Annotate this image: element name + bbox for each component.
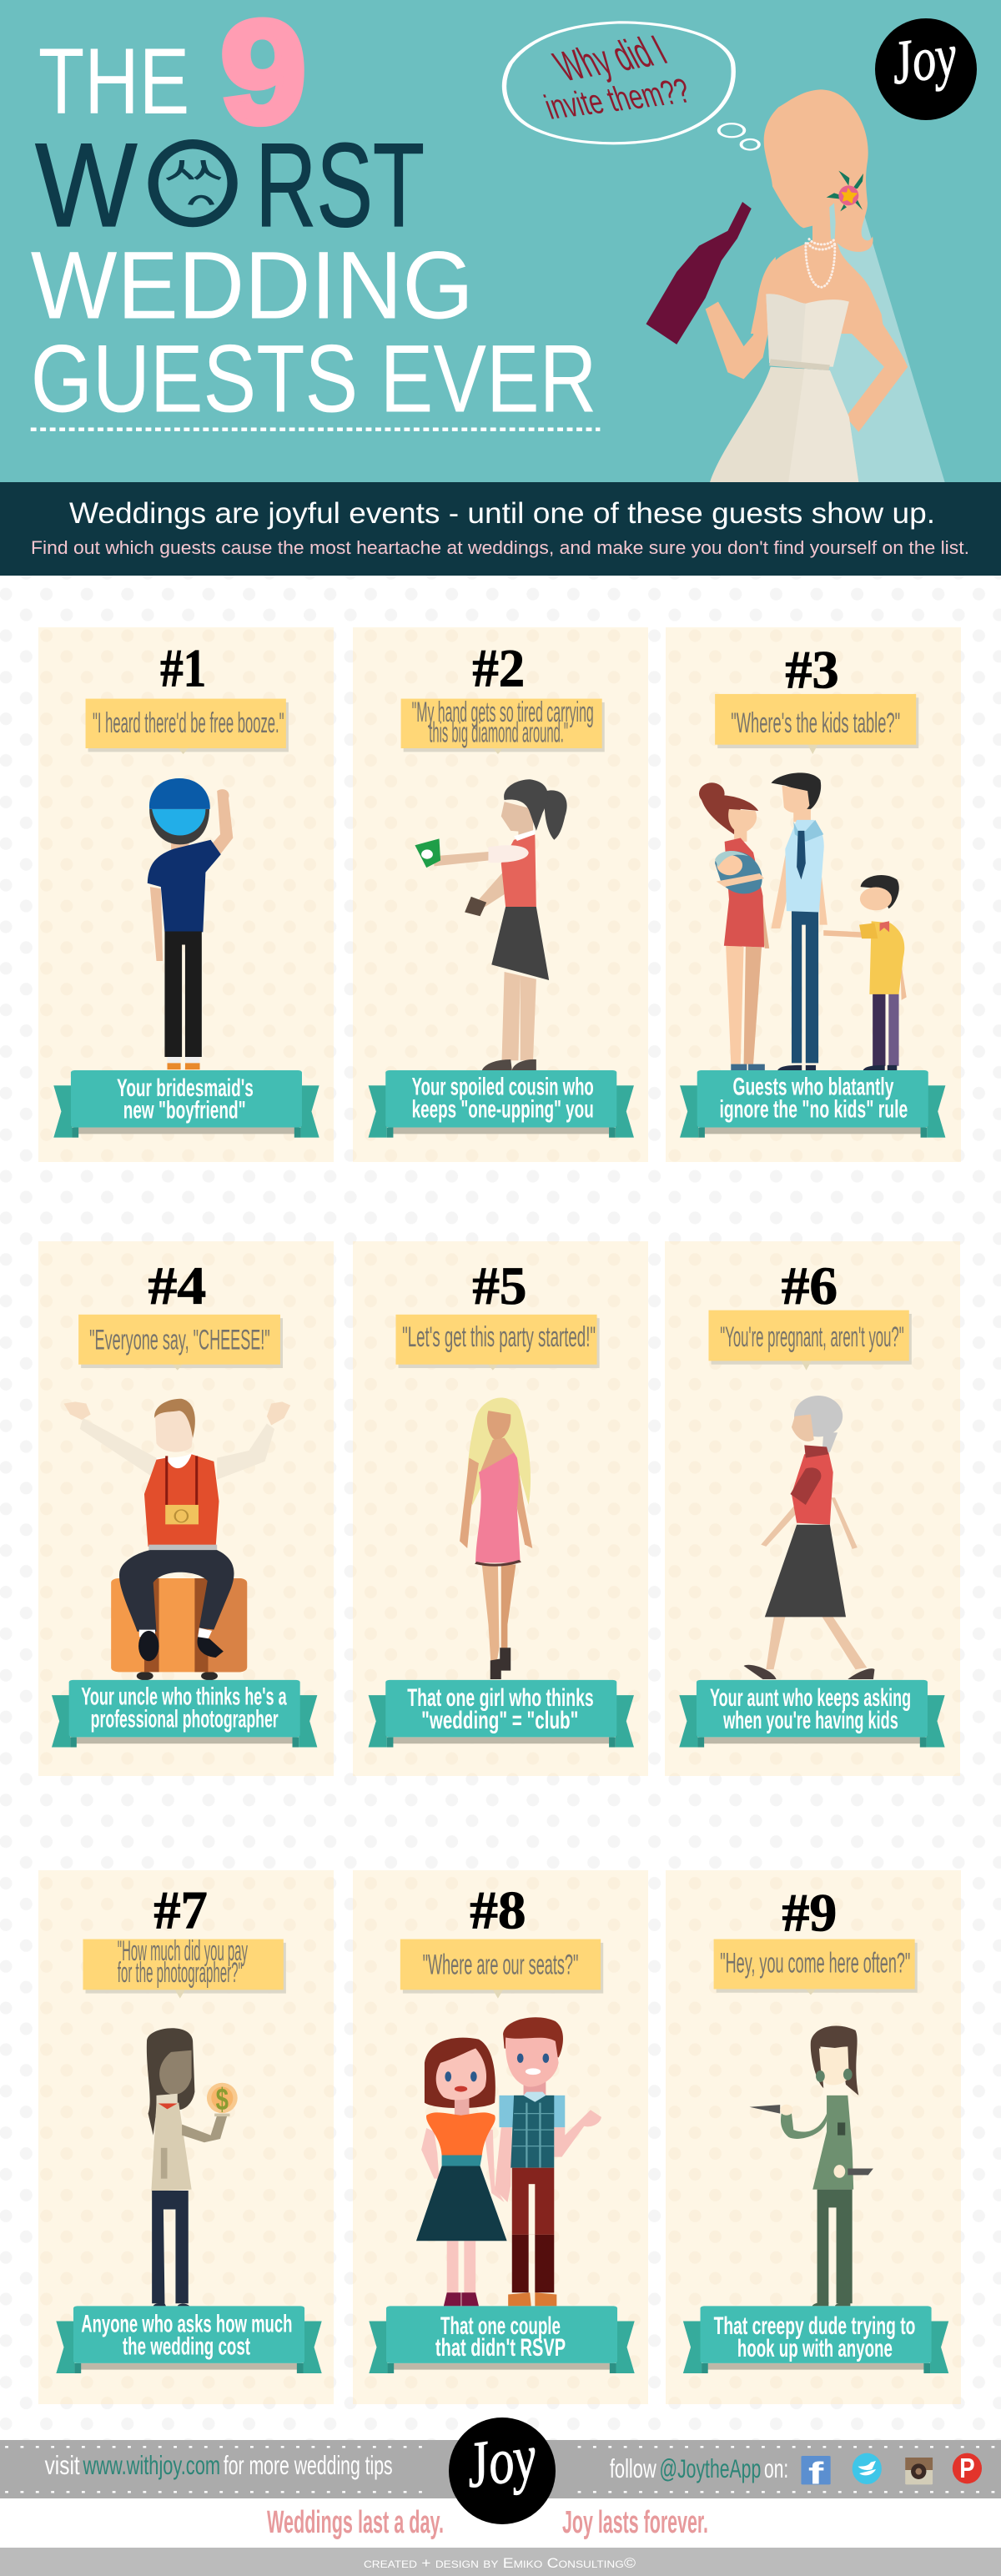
- text: "I heard there'd be free booze.": [93, 707, 284, 739]
- text: professional photographer: [91, 1705, 279, 1733]
- intro band: Weddings are joyful events - until one of these guests show up.: [69, 497, 935, 530]
- number: #8: [470, 1880, 526, 1940]
- thought bubble: invite them??: [540, 72, 696, 127]
- visit text: www.withjoy.com: [83, 2451, 220, 2480]
- ribbon: the wedding cost: [123, 2332, 250, 2360]
- icon: pinterest: P: [959, 2453, 975, 2483]
- panel: guest 6: [665, 1241, 959, 1776]
- figure: creepy dude with knives: [749, 2026, 873, 2306]
- text: keeps "one-upping" you: [412, 1095, 594, 1123]
- intro band: Find out which guests cause the most heartache at weddings, and make sure you don't find yourself on the list.: [31, 537, 969, 558]
- number: #5: [472, 1256, 526, 1316]
- text: this big diamond around.": [429, 717, 568, 748]
- panel: guest 9: [666, 1870, 961, 2404]
- ribbon: [369, 1070, 634, 1138]
- figure: family with kids: [699, 772, 907, 1070]
- icon: facebook: f: [808, 2456, 824, 2490]
- title: THE: [38, 30, 189, 133]
- panel: guest 2: [353, 627, 648, 1162]
- panel: guest 5: [353, 1241, 648, 1776]
- footer Joy logo: Joy: [461, 2420, 541, 2502]
- panel: guest 8: [353, 1870, 648, 2404]
- ribbon: [369, 2306, 635, 2373]
- title: RST: [255, 119, 425, 252]
- card backgrounds: [38, 627, 961, 2404]
- ribbon: new "boyfriend": [123, 1096, 246, 1124]
- number: #2: [472, 638, 525, 698]
- Joy logo: Joy: [887, 21, 961, 98]
- speech bubble: [401, 697, 605, 754]
- bride illustration: [646, 89, 945, 482]
- number: #3: [785, 640, 839, 700]
- figure: couple: [416, 2017, 601, 2306]
- visit text: visit: [45, 2451, 80, 2480]
- number: #7: [153, 1880, 208, 1940]
- ribbon: That one couple: [440, 2312, 561, 2339]
- speech bubble: [395, 1315, 600, 1371]
- figure: aunt: [744, 1396, 874, 1679]
- tagline: Joy lasts forever.: [562, 2505, 708, 2540]
- text: "Where are our seats?": [423, 1950, 578, 1980]
- follow text: follow: [610, 2454, 656, 2483]
- icon: instagram: [905, 2458, 933, 2484]
- text: Your uncle who thinks he's a: [81, 1683, 287, 1710]
- text: "How much did you pay: [118, 1935, 248, 1967]
- speech bubble: [78, 1315, 283, 1371]
- title: [31, 0, 600, 433]
- credit bar: created + design by Emiko Consulting©: [364, 2555, 636, 2571]
- figure: spoiled cousin: [415, 779, 567, 1070]
- ribbon: [52, 1680, 317, 1748]
- thought bubble: [505, 23, 759, 149]
- figure: uncle photographer on suitcase: [64, 1399, 290, 1680]
- footer bar: on:: [764, 2454, 788, 2483]
- figure: boyfriend in helmet: [148, 778, 233, 1069]
- footer bar: for more wedding tips: [224, 2451, 393, 2480]
- footer bar: [0, 2440, 1001, 2498]
- footer bar: @JoytheApp: [660, 2454, 761, 2483]
- credit bar: [0, 2548, 1001, 2576]
- text: for the photographer?": [118, 1957, 243, 1989]
- number: #4: [148, 1256, 206, 1316]
- footer Joy logo: [449, 2418, 556, 2524]
- panel: guest 7: [38, 1870, 334, 2404]
- panel: guest 1: [38, 627, 334, 1162]
- text: Your spoiled cousin who: [412, 1073, 594, 1100]
- speech bubble: [83, 1935, 286, 1999]
- text: Anyone who asks how much: [81, 2310, 293, 2337]
- ribbon: [53, 1070, 319, 1138]
- title: WEDDING: [31, 232, 474, 340]
- speech bubble: [400, 1940, 603, 1999]
- text: That one girl who thinks: [407, 1684, 594, 1711]
- ribbon: [369, 1680, 634, 1748]
- ribbon: Your bridesmaid's: [117, 1074, 254, 1101]
- header background: [0, 0, 1001, 482]
- figure: cost asker with coin: [147, 2028, 238, 2306]
- ribbon: [679, 1680, 945, 1748]
- figure: cost asker with coin: $: [216, 2082, 229, 2117]
- Joy logo: [875, 18, 977, 120]
- number: #9: [782, 1883, 837, 1943]
- panel: guest 3: [666, 627, 961, 1162]
- icon: pinterest: [953, 2453, 982, 2483]
- speech bubble: [714, 1940, 918, 1995]
- ribbon: [680, 1070, 945, 1138]
- figure: club girl: [460, 1397, 532, 1679]
- panel: guest 4: [38, 1241, 334, 1776]
- text: "Everyone say, "CHEESE!": [89, 1324, 270, 1356]
- ribbon: that didn't RSVP: [435, 2334, 566, 2361]
- speech bubble: [708, 1311, 912, 1371]
- ribbon: [683, 2306, 948, 2373]
- tagline: Weddings last a day.: [267, 2505, 444, 2540]
- speech bubble: [86, 699, 289, 754]
- intro band: [0, 482, 1001, 576]
- ribbon: "wedding" = "club": [421, 1706, 578, 1733]
- icon: twitter: [853, 2453, 882, 2484]
- ribbon: [56, 2306, 322, 2373]
- title: W: [35, 119, 138, 252]
- dotted page background: [0, 576, 1001, 2440]
- speech bubble: [715, 694, 918, 754]
- panel: guest 1: #1: [160, 638, 206, 698]
- number: #6: [782, 1256, 838, 1316]
